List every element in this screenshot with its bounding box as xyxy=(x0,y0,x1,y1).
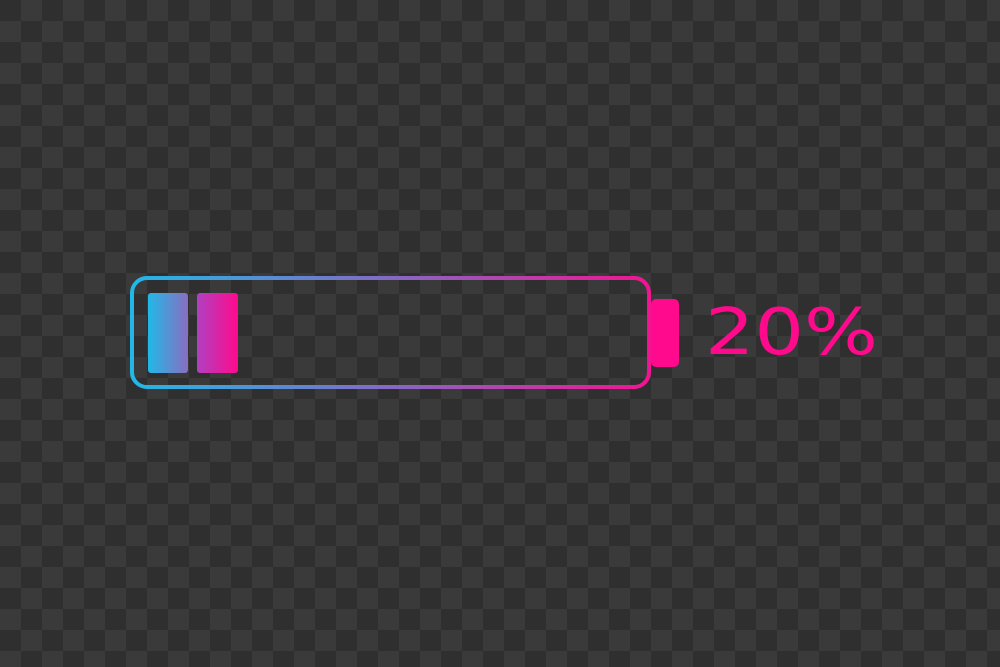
battery body outline xyxy=(132,278,649,387)
charge bars xyxy=(148,293,238,373)
percentage label: 20% xyxy=(705,296,878,370)
battery terminal xyxy=(651,299,679,367)
